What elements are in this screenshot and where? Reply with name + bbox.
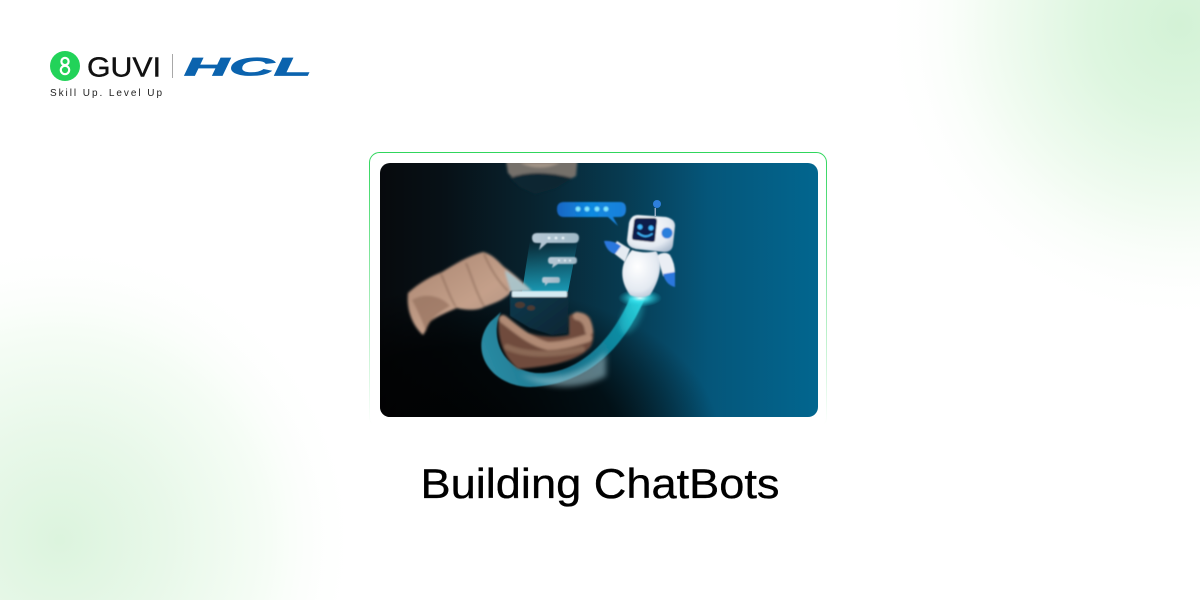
panel: image card border — [370, 152, 826, 428]
icon: GUVI green badge — [50, 51, 80, 81]
chat bubbles — [532, 202, 626, 286]
robot left arm — [604, 241, 630, 262]
robot — [604, 200, 675, 307]
logo divider — [172, 54, 173, 78]
glowing ribbon — [481, 293, 649, 387]
icon: robot light spot — [619, 292, 661, 306]
robot right arm — [657, 253, 675, 287]
pointing hand — [408, 252, 532, 335]
photo: person using phone with chatbot — [380, 155, 818, 417]
robot head — [627, 215, 675, 252]
grey chat bubble small — [542, 277, 560, 286]
grey chat bubble large — [532, 233, 579, 250]
robot antenna — [653, 200, 661, 216]
grey chat bubble medium — [548, 257, 577, 268]
HCL wordmark: HCL — [184, 54, 312, 82]
light beam above phone — [522, 240, 578, 292]
title: Building ChatBots — [420, 460, 780, 507]
GUVI wordmark: GUVI — [87, 52, 161, 82]
person's chin and neck — [504, 163, 579, 184]
tagline: Skill Up. Level Up — [50, 88, 162, 99]
holding hand — [498, 312, 594, 369]
smartphone — [510, 291, 569, 335]
robot body — [622, 250, 660, 297]
blue chat bubble — [557, 202, 626, 226]
person's shirt shading — [380, 306, 707, 417]
logo: GUVI and HCL — [50, 51, 312, 99]
